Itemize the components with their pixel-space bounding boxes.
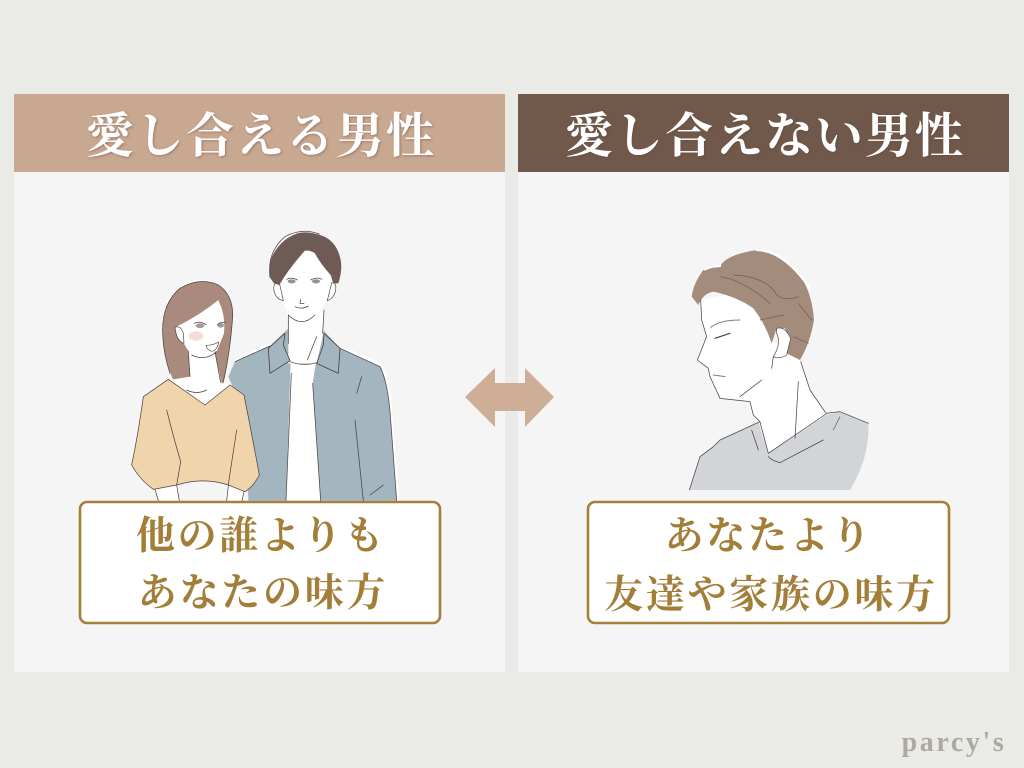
callout text: right line 1: あなたより	[665, 515, 873, 558]
callout: left	[80, 502, 440, 623]
illustration: man looking down	[689, 250, 868, 490]
woman	[132, 281, 259, 501]
illustration: couple	[132, 231, 398, 501]
heading bar: left	[14, 94, 505, 172]
panel: men who cannot love each other	[518, 94, 1009, 672]
callout text: left line 2: あなたの味方	[138, 572, 388, 615]
arrow: double headed	[465, 368, 554, 427]
heading: left: 愛し合える男性	[86, 110, 436, 163]
logo text: parcy's	[902, 727, 1006, 758]
callout text: right line 2: 友達や家族の味方	[604, 574, 938, 617]
callout: right	[588, 502, 949, 623]
man	[228, 231, 398, 501]
heading: right: 愛し合えない男性	[565, 110, 965, 163]
callout text: left line 1: 他の誰よりも	[136, 515, 386, 558]
panel: men who can love each other	[14, 94, 505, 672]
heading bar: right	[518, 94, 1009, 172]
